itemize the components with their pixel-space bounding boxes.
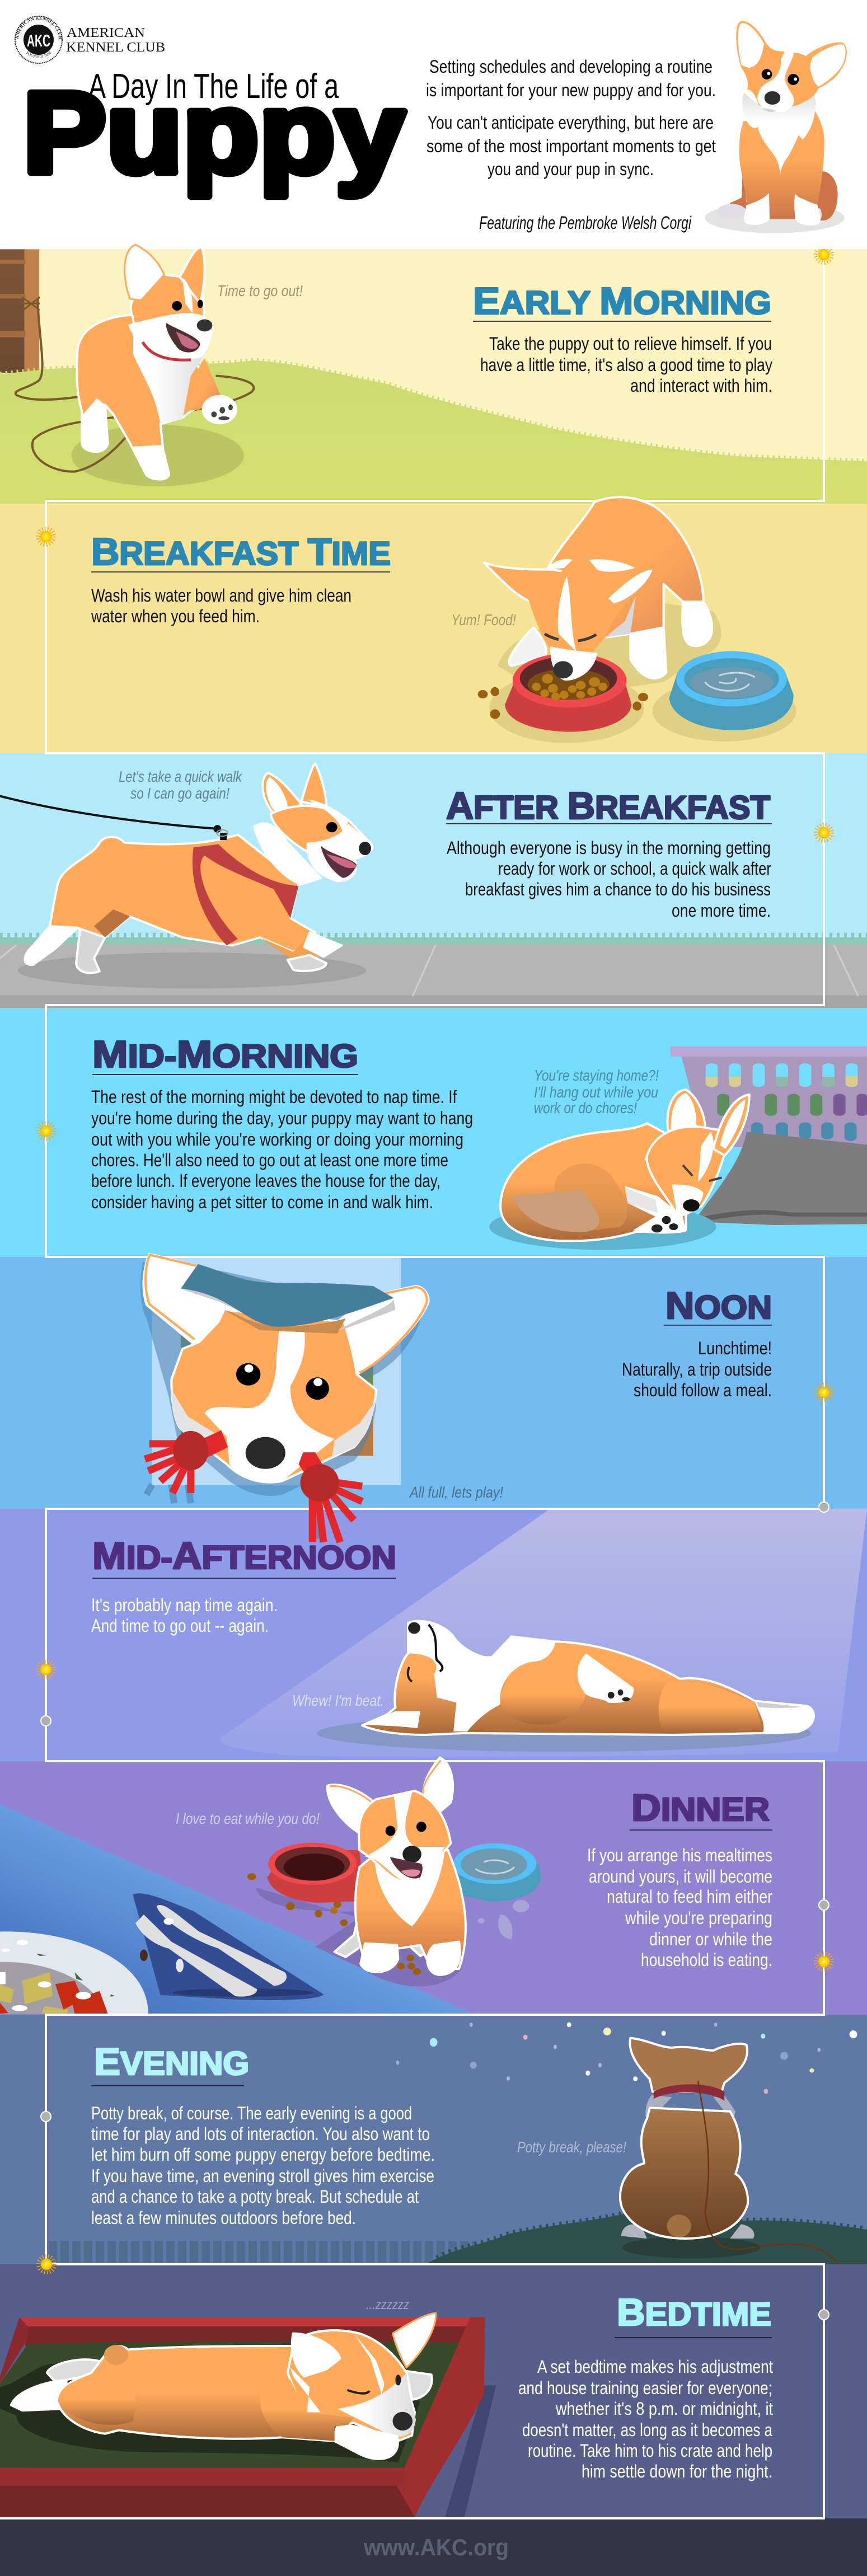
speech: potty break: Potty break, please! [517,2138,626,2156]
intro text: some of the most important moments to get [427,136,716,156]
red bowl [267,1843,365,1903]
body copy: natural to feed him either [607,1887,772,1907]
intro text: is important for your new puppy and for you. [426,80,716,100]
speech: staying home: I'll hang out while you [534,1083,658,1101]
dog door [152,1258,401,1485]
icon: moon marker bedtime [819,2310,829,2320]
illustration: sitting corgi [705,21,847,233]
panel: noon background [0,1257,867,1509]
body copy [587,1845,772,1970]
body copy [447,838,771,921]
illustration: laundry basket, pillow and sleeping corgi [489,1047,867,1250]
body copy: And time to go out -- again. [91,1616,269,1636]
icon: moon marker evening [41,2112,51,2122]
icon: moon marker mid-afternoon [41,1716,51,1726]
heading: EARLY MORNING [473,280,771,322]
body copy: household is eating. [641,1950,772,1970]
speech: whew: Whew! I'm beat. [292,1692,384,1709]
icon: sun marker after breakfast [817,826,831,839]
icon: sun marker evening [40,2258,53,2271]
body copy: If you arrange his mealtimes [587,1845,772,1865]
rope toy [145,1430,362,1542]
body copy: let him burn off some puppy energy before bedtime. [91,2145,435,2165]
scenery: dinner table with plate and cutlery [0,1804,473,2014]
body copy: routine. Take him to his crate and help [528,2441,772,2461]
icon: sun marker dinner [817,1955,831,1968]
speech: quick walk [119,768,243,802]
body copy: out with you while you're working or doing your morning [91,1129,463,1149]
heading: DINNER [631,1786,770,1829]
logo: American Kennel Club: KENNEL CLUB [66,40,165,55]
body copy: one more time. [672,900,771,921]
sitting corgi [327,1758,466,1975]
section: noon text [622,1284,772,1400]
body copy: Naturally, a trip outside [622,1359,772,1380]
body copy: you're home during the day, your puppy may want to hang [91,1108,473,1128]
section: bedtime text [518,2291,773,2481]
intro text: Featuring the Pembroke Welsh Corgi [479,213,692,233]
heading: NOON [666,1284,772,1327]
body copy: have a little time, it's also a good time to play [480,355,772,375]
heading: EVENING [94,2040,249,2083]
laundry basket [670,1047,867,1147]
panel: after breakfast background [0,753,867,1005]
body copy: time for play and lots of interaction. You also want to [91,2124,430,2144]
illustration: corgi on leash [16,245,254,486]
kibble and water drops [247,1873,529,1975]
intro text: Setting schedules and developing a routine [429,57,713,77]
speech: love to eat: I love to eat while you do! [176,1810,320,1827]
icon: sun marker breakfast [39,530,53,543]
body copy: Although everyone is busy in the morning getting [447,838,771,858]
intro text: you and your pup in sync. [488,159,654,179]
section: after breakfast text [446,785,772,921]
panel: footer background [0,2518,867,2576]
panel: mid-afternoon background [0,1509,867,1761]
icon: sun marker mid-morning [39,1124,53,1138]
body copy [91,2103,435,2228]
body copy: least a few minutes outdoors before bed. [91,2208,356,2228]
body copy [622,1338,772,1400]
icon: sun marker early morning [817,248,831,261]
sleeping corgi [500,1090,749,1241]
body copy: ready for work or school, a quick walk after [498,858,771,879]
corgi head [143,1254,429,1482]
icon: sun marker noon [817,1386,831,1399]
speech: quick walk: so I can go again! [130,785,229,802]
water bowl [453,1843,541,1901]
panel: early morning background [0,249,867,501]
heading: MID-AFTERNOON [92,1535,396,1577]
section: mid-morning text [91,1033,473,1212]
illustration: corgi sleeping in crate [11,2313,436,2460]
speech: all full: All full, lets play! [409,1484,503,1501]
speech: time to go out: Time to go out! [217,282,303,299]
logo: American Kennel Club: AMERICAN KENNEL CLUB [16,16,62,39]
body copy [91,585,352,626]
body copy: breakfast gives him a chance to do his business [465,879,771,899]
illustration: corgi with empty bowl and water bowl [247,1758,541,1987]
body copy: before lunch. If everyone leaves the house for the day, [91,1171,440,1191]
logo: American Kennel Club: FOUNDED 1884 [26,51,51,58]
heading: AFTER BREAKFAST [446,785,770,827]
body copy [91,1595,278,1636]
heading: BREAKFAST TIME [91,531,391,573]
panel: mid-morning background [0,1005,867,1257]
body copy: It's probably nap time again. [91,1595,278,1615]
section: evening text [91,2040,435,2228]
plate of food [0,1931,148,2014]
footer url: www.AKC.org [363,2534,509,2560]
body copy [480,334,772,396]
illustration: corgi eating from bowl, water bowl [478,497,796,743]
icon: sun marker mid-afternoon [39,1663,53,1676]
section: dinner text [587,1786,772,1970]
body copy: whether it's 8 p.m. or midnight, it [555,2399,773,2419]
scenery: after breakfast sidewalk and hedge [0,937,867,1008]
speech: zzzzzz: ...zzzzzz [366,2297,409,2312]
panel: breakfast time background [0,501,867,753]
illustration: corgi walking in harness [0,763,372,988]
title: A Day In The Life of a [88,67,339,106]
body copy: Take the puppy out to relieve himself. If you [489,334,772,354]
intro text [426,57,716,233]
section: mid-afternoon text [91,1535,396,1636]
intro text: You can't anticipate everything, but here are [428,112,714,133]
napkin and cutlery [133,1893,324,2000]
panel: evening background [0,2015,867,2264]
body copy: Lunchtime! [698,1338,772,1358]
logo: American Kennel Club: AMERICAN [67,26,145,40]
panel: dinner background [0,1761,867,2015]
speech: yum food: Yum! Food! [451,611,516,628]
body copy [91,1087,473,1212]
scenery: mid-afternoon sunbeam [221,1509,867,1757]
panel: bedtime background [0,2264,867,2518]
section: early morning text [473,280,772,396]
icon: moon marker dinner [819,1900,829,1910]
illustration: corgi from behind under stars [620,2038,838,2264]
body copy: should follow a meal. [634,1380,772,1400]
speech: staying home: You're staying home?! [534,1067,659,1084]
title: Puppy [23,68,405,197]
panel: header background [0,0,867,249]
body copy: consider having a pet sitter to come in and walk him. [91,1192,433,1212]
body copy: Wash his water bowl and give him clean [91,585,352,606]
body copy: water when you feed him. [91,606,260,626]
body copy: around yours, it will become [589,1866,772,1887]
body copy: A set bedtime makes his adjustment [537,2357,773,2377]
illustration: corgi lying on its back [317,1621,814,1752]
body copy: doesn't matter, as long as it becomes a [522,2420,772,2440]
speech: staying home: work or do chores! [534,1099,637,1116]
body copy: him settle down for the night. [582,2461,772,2481]
body copy: and house training easier for everyone; [518,2378,772,2398]
heading: MID-MORNING [92,1033,358,1076]
body copy: and a chance to take a potty break. But schedule at [91,2186,419,2207]
scenery: evening night sky, fence and hill [49,2022,867,2264]
logo: American Kennel Club [15,16,165,64]
icon: moon marker noon [819,1502,829,1512]
scenery: bedtime crate [0,2317,496,2517]
section: breakfast time text [91,531,391,626]
heading: BEDTIME [617,2291,771,2334]
body copy: Potty break, of course. The early evening is a good [91,2103,412,2123]
body copy: while you're preparing [625,1908,772,1928]
dog pillow [694,1132,867,1225]
body copy: The rest of the morning might be devoted to nap time. If [91,1087,457,1107]
body copy: If you have time, an evening stroll gives him exercise [91,2166,434,2186]
illustration: corgi head through dog door with toy [140,1254,429,1542]
body copy: dinner or while the [649,1929,772,1949]
body copy: and interact with him. [630,376,772,396]
body copy: chores. He'll also need to go out at least one more time [91,1150,448,1170]
body copy [518,2357,773,2481]
logo: American Kennel Club: AKC [27,31,50,50]
speech: staying home [534,1067,659,1116]
scenery: yard fence and grass [0,249,867,504]
flap on head [181,1264,395,1334]
speech: quick walk: Let's take a quick walk [119,768,243,785]
